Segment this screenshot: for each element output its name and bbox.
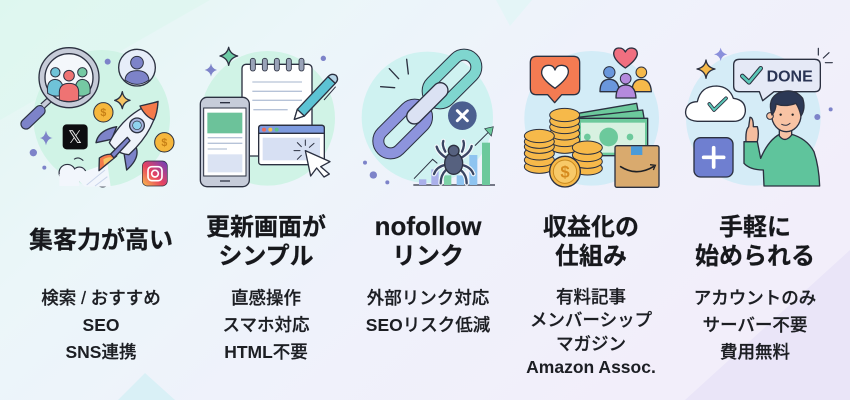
column 1 text [41,288,161,362]
icon: person with DONE speech bubble [686,48,833,186]
icon: magnifier, rocket and social media: $ [100,107,106,119]
column 2 text: スマホ対応 [223,315,310,335]
icon: person with DONE speech bubble: DONE [767,68,813,85]
column 2 heading: 更新画面が [206,213,326,241]
column 5 text: 費用無料 [720,342,790,362]
icon: coins, cash and package [524,48,659,187]
column 4 text: Amazon Assoc. [526,357,656,377]
column 2 text: HTML不要 [224,342,308,362]
column 5 text: サーバー不要 [703,315,807,335]
column 4 text [526,287,656,377]
column 4 heading [543,214,639,270]
icon: phone, notepad and browser window [200,47,338,187]
column 3 heading: リンク [392,243,464,270]
column 3 text: SEOリスク低減 [366,315,491,335]
column 3 text [366,288,491,335]
column 4 heading: 仕組み [555,243,627,270]
column 1 text: SEO [83,315,119,335]
column 2 heading: シンプル [218,243,314,270]
icon: magnifier, rocket and social media: 𝕏 [68,127,82,147]
column 3 text: 外部リンク対応 [367,288,490,308]
icon: magnifier, rocket and social media: $ [161,137,167,149]
column 2 text [223,288,310,362]
column 4 heading: 収益化の [543,214,639,241]
icon: magnifier, rocket and social media [26,48,174,187]
column 4 text: マガジン [556,334,626,354]
icon: coins, cash and package: $ [560,163,570,182]
column 4 text: メンバーシップ [530,310,653,330]
column 2 heading [206,213,326,270]
column 3 heading: nofollow [375,211,482,241]
column 1 text: 検索 / おすすめ [41,288,161,308]
column 5 heading: 手軽に [719,214,791,241]
column 5 heading: 始められる [695,243,815,270]
column 1 heading: 集客力が高い [29,226,173,254]
column 5 text: アカウントのみ [694,288,816,308]
column 1 text: SNS連携 [66,342,136,362]
column 5 text [694,288,816,362]
column 2 text: 直感操作 [231,288,301,308]
column 5 heading [695,214,815,270]
icon: broken chain link and spider [362,50,495,185]
column 3 heading [375,211,482,270]
column 4 text: 有料記事 [556,287,626,307]
